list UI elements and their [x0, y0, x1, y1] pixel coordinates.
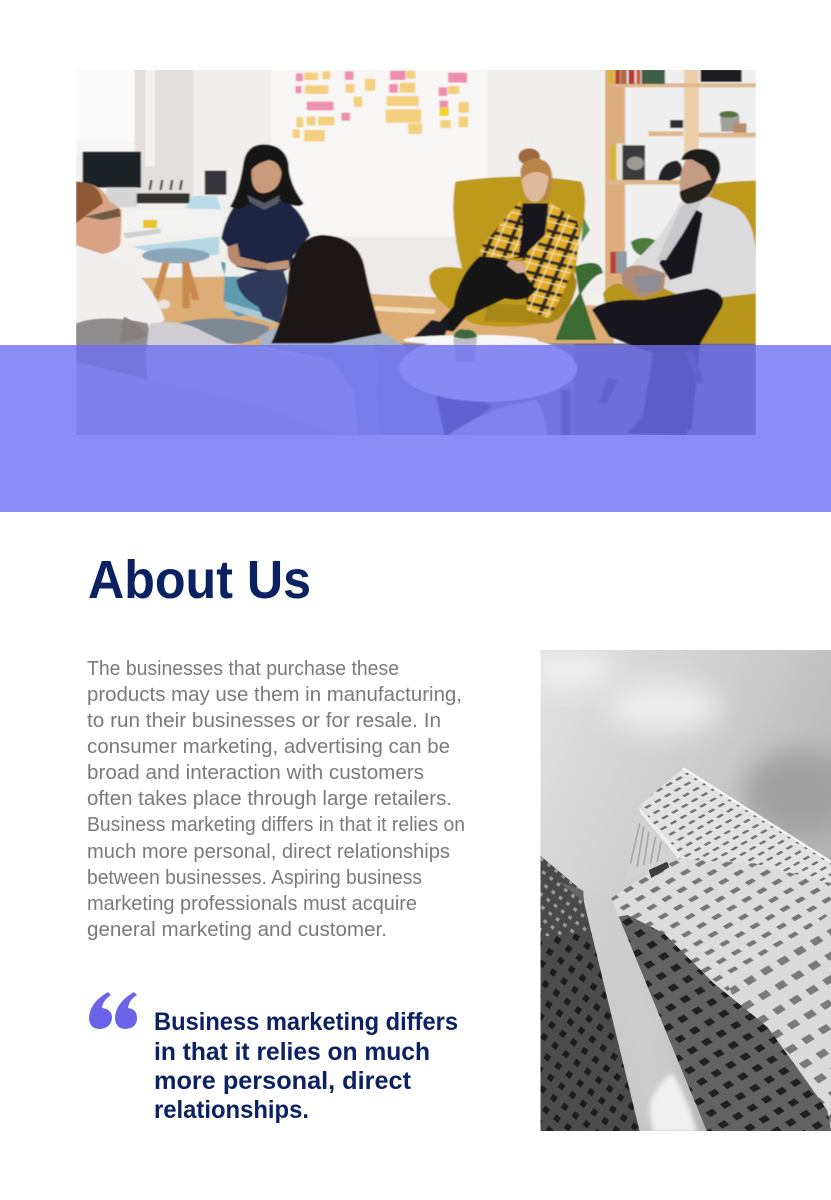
plant behind chair: [555, 263, 603, 340]
woman from behind: [258, 326, 408, 435]
man with glasses, left: [76, 182, 122, 255]
pull quote: more personal, direct: [154, 1067, 412, 1095]
body text: to run their businesses or for resale. In: [87, 710, 441, 732]
woman in navy top: [221, 262, 262, 317]
pull quote: in that it relies on much: [154, 1038, 430, 1066]
monitor and desk: [83, 152, 141, 188]
bookshelf: [605, 67, 625, 293]
purple translucent band: [0, 345, 831, 512]
yellow chair, right: [708, 180, 756, 298]
left tower: [540, 856, 640, 1132]
title: About Us: [88, 550, 311, 610]
icon: quotation mark: [89, 992, 137, 1029]
man's shoes and chair legs: [628, 418, 687, 434]
round table: [399, 335, 577, 402]
body text: consumer marketing, advertising can be: [87, 736, 450, 758]
body text: products may use them in manufacturing,: [87, 684, 462, 706]
body text: marketing professionals must acquire: [87, 893, 417, 915]
pull quote: Business marketing differs: [154, 1008, 458, 1036]
plant on shelf: [631, 238, 655, 256]
photo: team meeting in an office: [76, 60, 756, 440]
body text: often takes place through large retailers.: [87, 788, 452, 810]
woman in plaid jacket: [518, 148, 540, 165]
pull quote: [154, 1008, 458, 1124]
floor: [119, 277, 614, 347]
pull quote: relationships.: [154, 1096, 309, 1124]
right tower, sunlit face: [611, 769, 831, 1132]
photo: black and white skyscrapers: [527, 650, 831, 1132]
body text: broad and interaction with customers: [87, 762, 424, 784]
foreground sofa arm: [449, 400, 547, 437]
body text: The businesses that purchase these: [87, 658, 399, 680]
body text: general marketing and customer.: [87, 919, 387, 941]
body text: [87, 658, 465, 941]
rear tower: [625, 815, 679, 882]
bearded man: [627, 195, 756, 300]
body text: Business marketing differs in that it relies on: [87, 814, 465, 836]
right tower, shadowed face: [619, 915, 831, 1132]
sticky notes: [295, 71, 467, 121]
grey sofa and cushions: [165, 318, 269, 343]
body text: much more personal, direct relationships: [87, 841, 450, 863]
dark trousers on the floor: [437, 396, 492, 435]
yellow chair, middle: [429, 177, 585, 327]
floor rug: [573, 342, 756, 435]
small white cloud: [650, 1073, 697, 1132]
body text: between businesses. Aspiring business: [87, 867, 422, 889]
